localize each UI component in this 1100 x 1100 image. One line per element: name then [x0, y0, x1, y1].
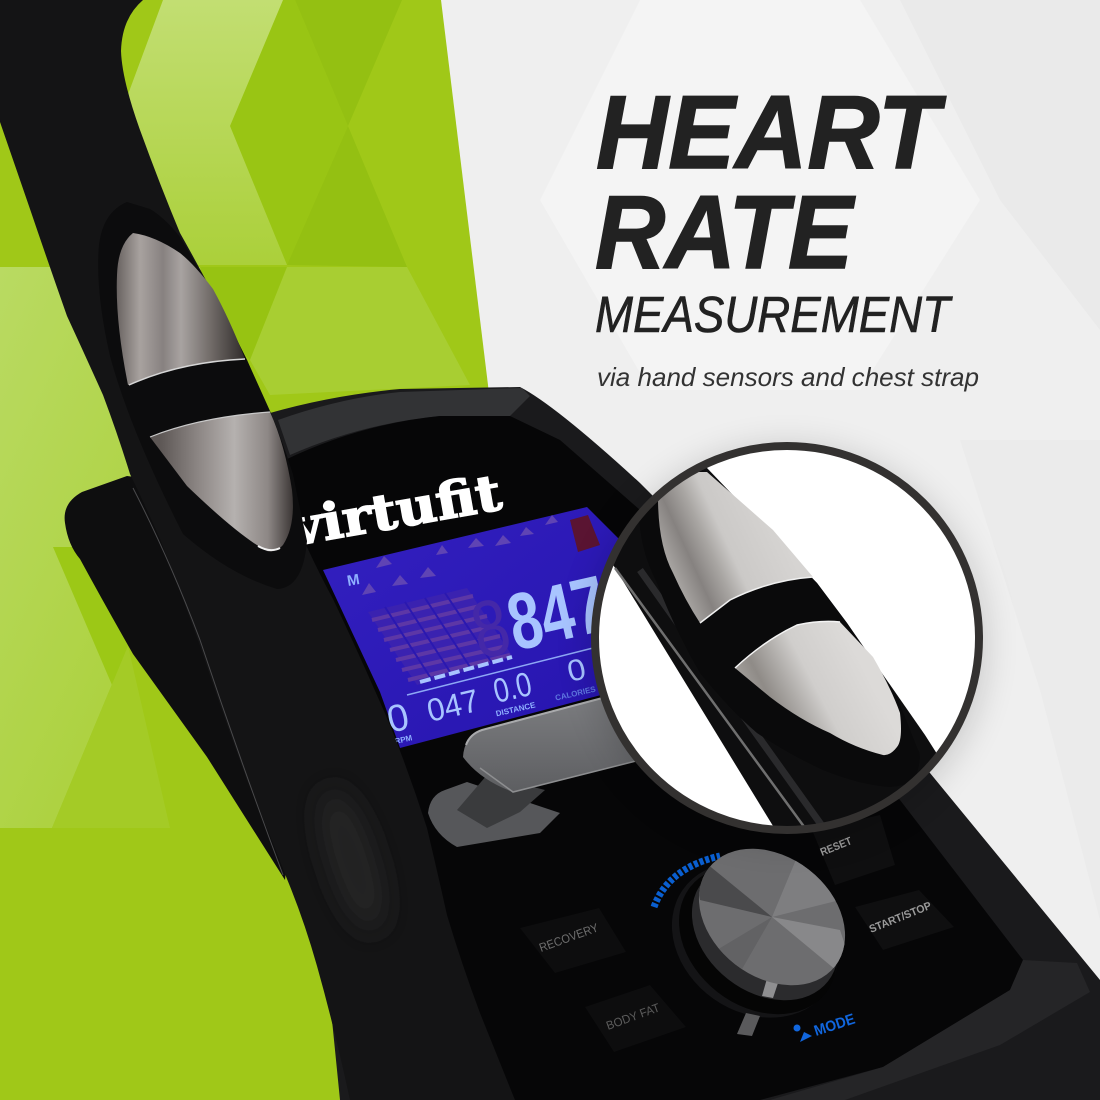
LCD distance: DISTANCE — [495, 700, 537, 718]
LCD screen — [323, 507, 620, 748]
heading: HEART RATE: HEART — [596, 75, 946, 191]
button: reset: RESET — [819, 835, 854, 859]
mode slot — [737, 1013, 760, 1036]
LCD icons row — [362, 515, 558, 595]
zoomed handlebar edge — [615, 568, 805, 828]
handlebar edge highlight — [133, 488, 283, 875]
LCD calories: CALORIES — [554, 684, 597, 703]
upper metal sensor — [117, 233, 245, 385]
button: start stop — [855, 890, 954, 950]
LCD time: 047 — [423, 682, 482, 729]
button: body fat — [585, 985, 686, 1052]
LCD main readout: 8 — [463, 581, 518, 676]
zoomed handlebar — [614, 468, 936, 826]
button: recovery: RECOVERY — [537, 920, 600, 955]
button: recovery — [520, 908, 626, 973]
console back plate — [65, 476, 320, 880]
zoomed sensor bezel — [662, 578, 858, 736]
handlebar sheen — [308, 782, 396, 938]
phone holder clip — [428, 692, 640, 847]
LCD RPM readout: 0 — [383, 696, 413, 742]
caption: via hand sensors and chest strap — [597, 362, 979, 392]
lower metal sensor — [150, 412, 293, 551]
knob — [650, 848, 846, 1014]
button: body fat: BODY FAT — [604, 1000, 662, 1033]
brand logo: virtufit — [284, 463, 506, 558]
background: green geometric panel — [0, 0, 560, 1100]
console body — [270, 387, 1100, 1100]
button: start stop: START/STOP — [868, 900, 933, 936]
mode label: MODE — [812, 1011, 857, 1040]
LCD main readout: 847 — [499, 559, 615, 667]
LCD main readout — [463, 559, 615, 676]
button: reset — [812, 815, 895, 885]
magnified circle callout — [590, 446, 983, 870]
zoomed upper sensor — [658, 472, 813, 623]
handlebar — [0, 0, 515, 1100]
LCD warning patch — [570, 515, 600, 552]
LCD calories — [547, 651, 597, 703]
heading: HEART RATE — [595, 75, 946, 291]
zoomed lower sensor — [735, 621, 901, 755]
subheading: MEASUREMENT: MEASUREMENT — [595, 286, 953, 343]
LCD calories: 0 — [564, 653, 589, 689]
mode label — [794, 1011, 857, 1042]
knob well — [642, 831, 868, 1049]
LCD bar graph — [368, 588, 593, 695]
heading: HEART RATE: RATE — [595, 175, 855, 291]
LCD letter M: M — [346, 571, 361, 590]
LCD RPM readout: RPM — [394, 733, 413, 746]
control panel buttons — [520, 815, 954, 1052]
hand pulse sensor on handlebar — [98, 202, 307, 589]
LCD distance — [487, 665, 537, 718]
LCD distance: 0.0 — [490, 665, 535, 711]
